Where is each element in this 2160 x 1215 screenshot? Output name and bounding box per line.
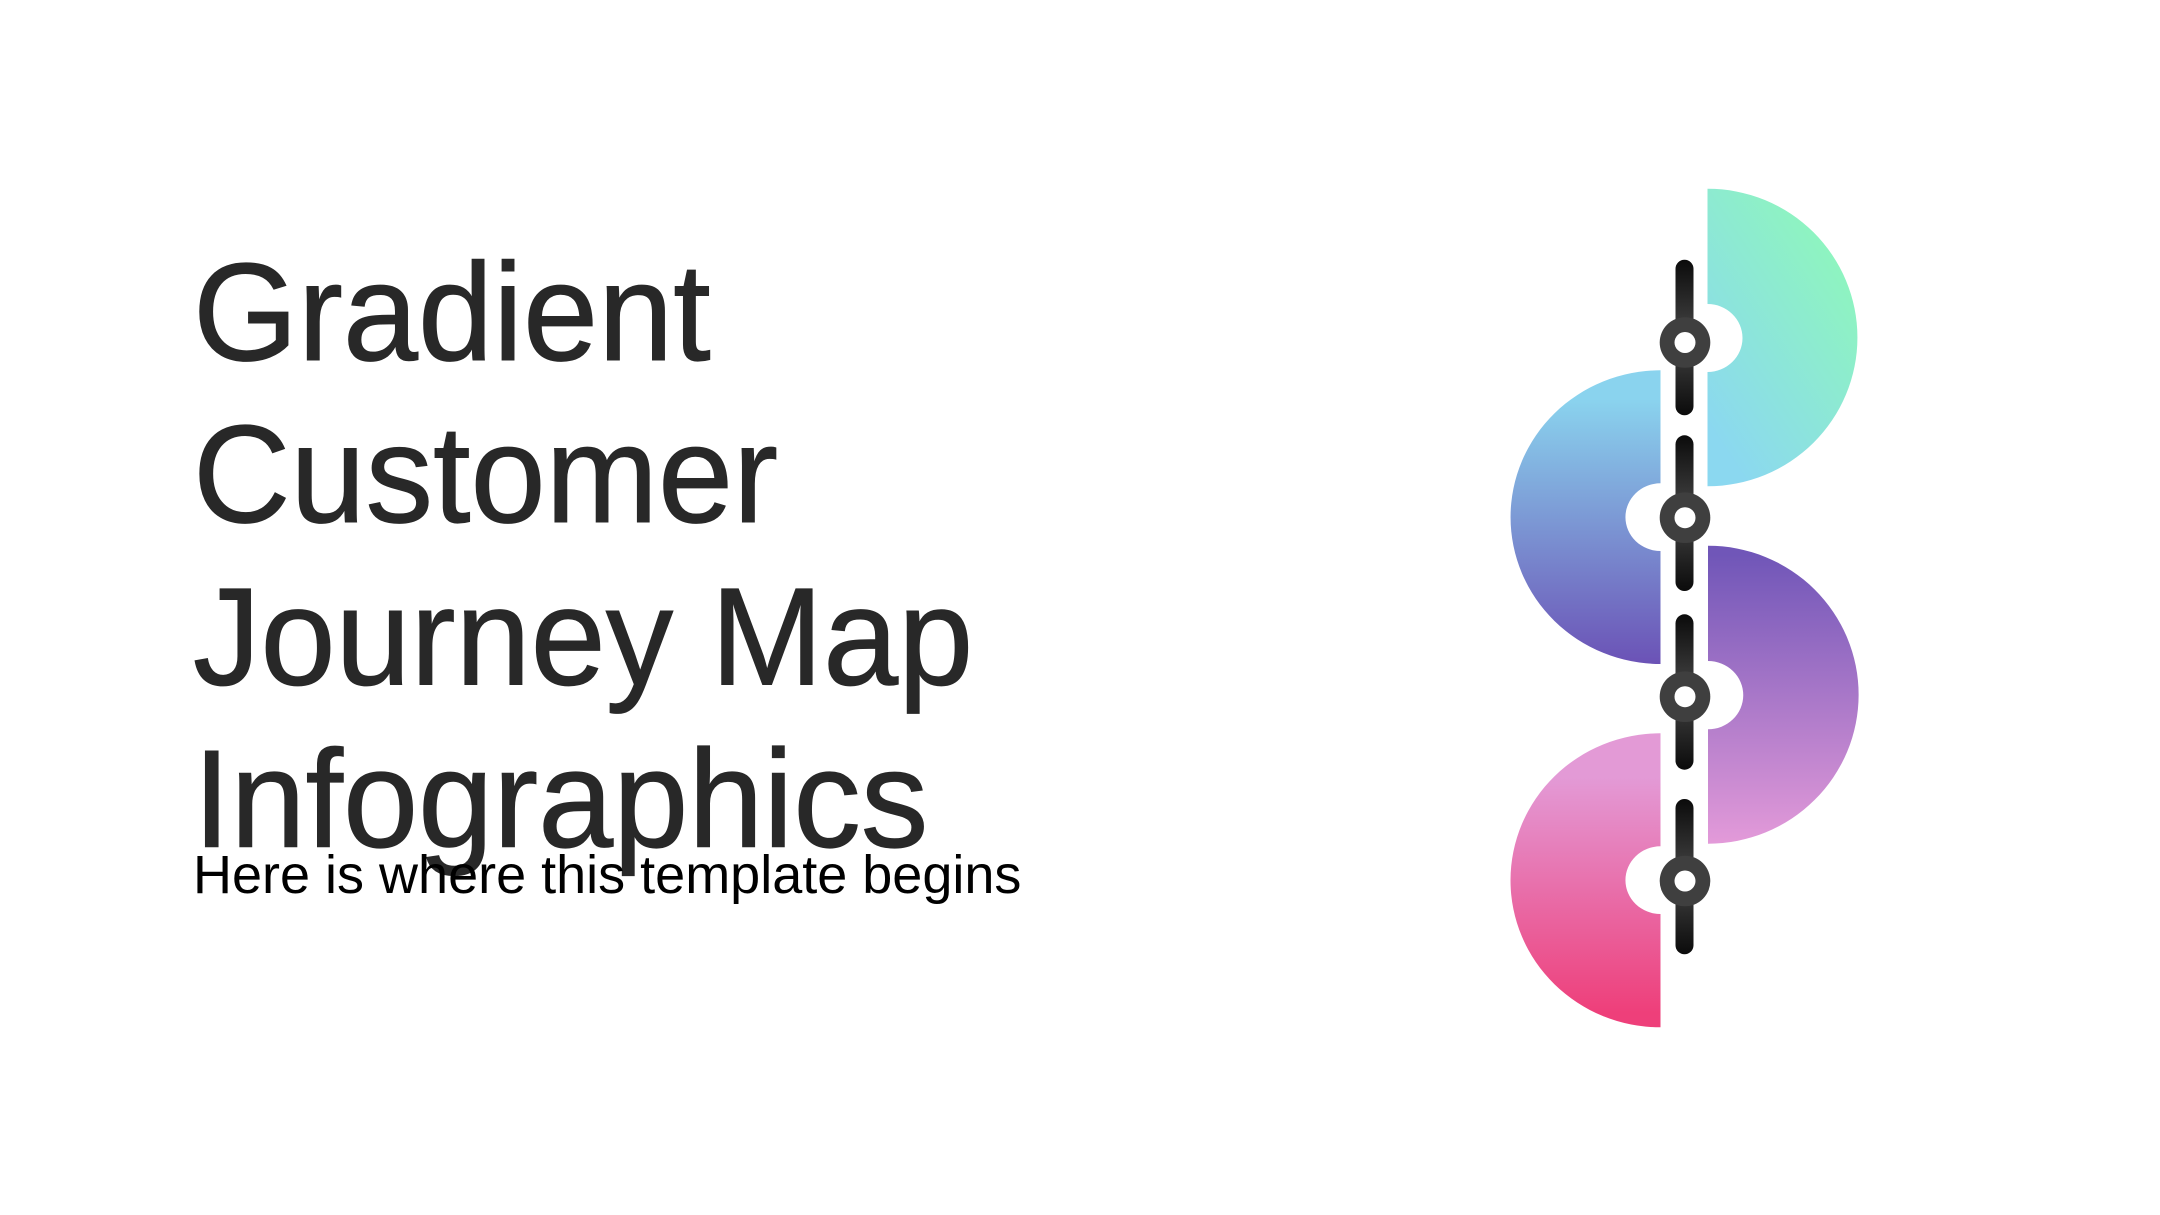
title <box>193 235 973 877</box>
segment 3: purple half circle <box>1708 546 1859 844</box>
title: Journey Map <box>193 560 973 715</box>
subtitle: Here is where this template begins <box>193 845 1021 905</box>
segment 1: mint half circle <box>1708 189 1857 486</box>
segment 4: pink half circle <box>1510 733 1660 1027</box>
marker 3 <box>1660 614 1710 770</box>
marker 2 <box>1660 435 1710 591</box>
segment 2: blue half circle <box>1511 370 1660 664</box>
title: Gradient <box>193 235 711 390</box>
title: Infographics <box>193 722 928 877</box>
marker 1 <box>1660 260 1710 415</box>
marker 4 <box>1660 799 1710 954</box>
title: Customer <box>193 397 778 552</box>
journey map graphic <box>1510 189 1859 1027</box>
